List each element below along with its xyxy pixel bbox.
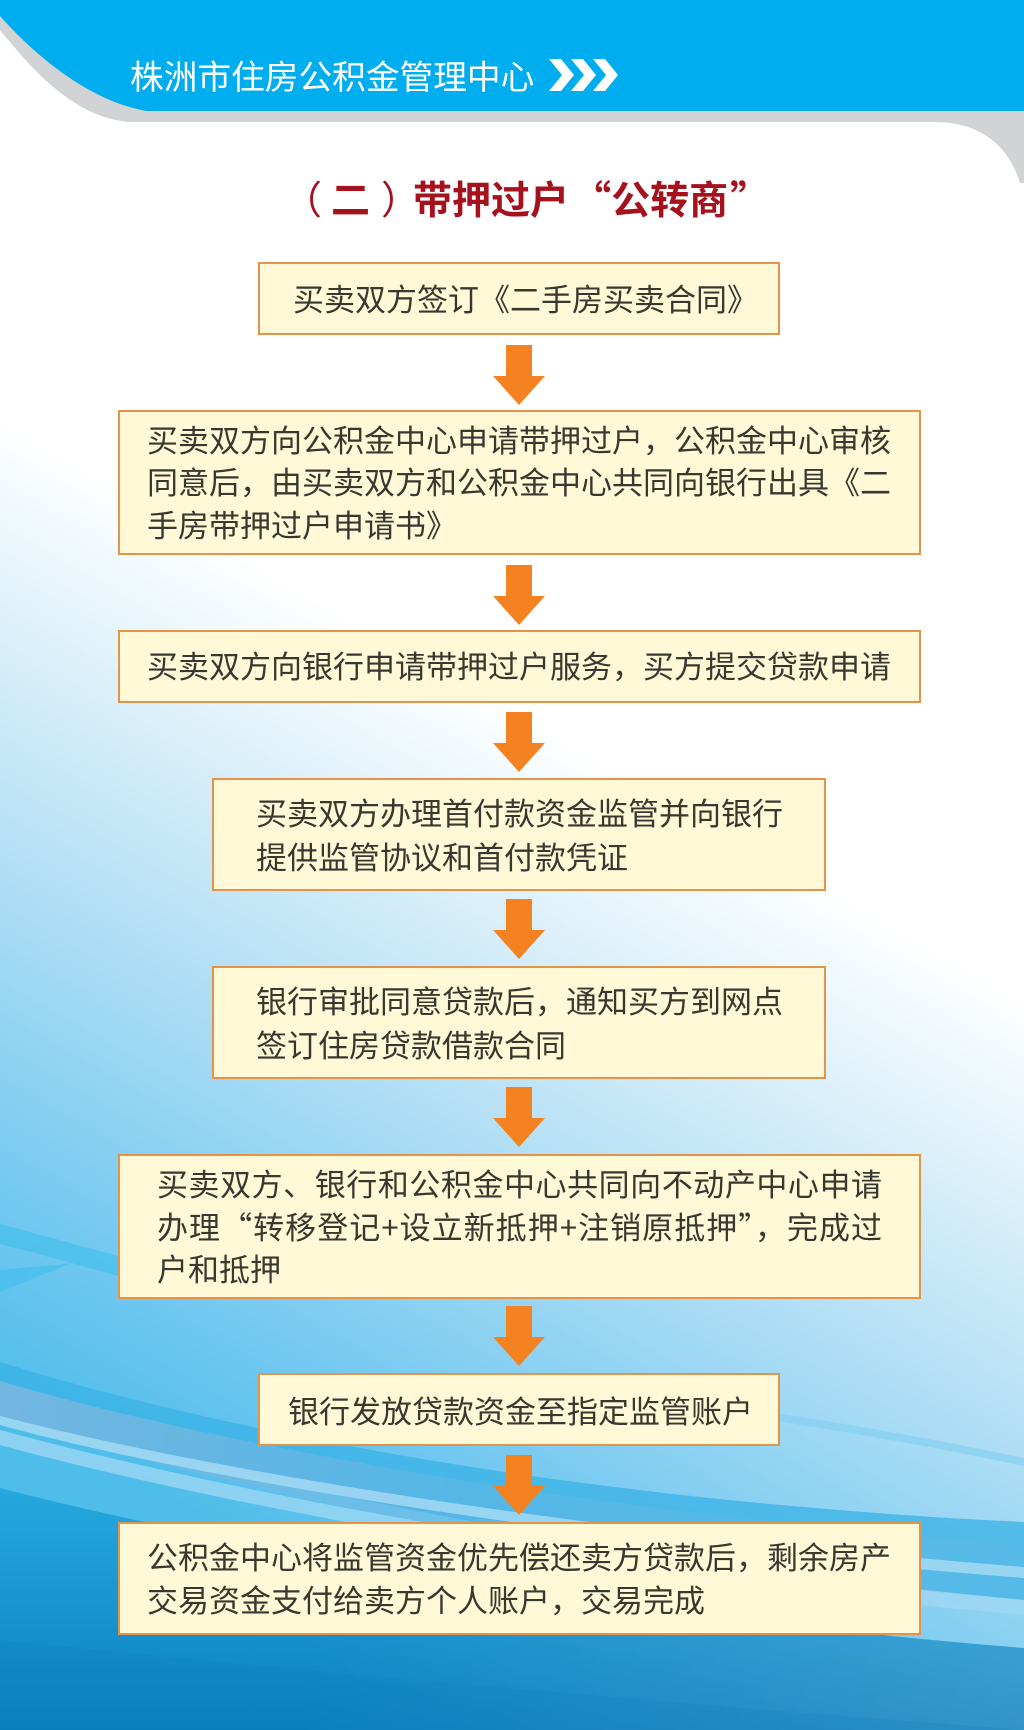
step 2 box: 买卖双方向公积金中心申请带押过户，公积金中心审核 [147,416,891,461]
step 7 box: 银行发放贷款资金至指定监管账户 [288,1387,753,1432]
step 1 box [258,262,780,335]
step 4 box: 提供监管协议和首付款凭证 [256,833,628,878]
step 2 box: 同意后，由买卖双方和公积金中心共同向银行出具《二 [147,458,891,503]
step 1 box: 买卖双方签订《二手房买卖合同》 [293,275,758,320]
step 6 box: 户和抵押 [157,1245,281,1290]
arrow 6 [493,1306,545,1366]
title: （二 ）带押过户“公转商” [283,170,769,226]
step 6 box: 办理“转移登记+设立新抵押+注销原抵押”，完成过 [157,1203,882,1248]
arrow 7 [493,1455,545,1515]
arrow 2 [493,565,545,625]
step 2 box [118,410,921,555]
header organization name: 株洲市住房公积金管理中心 [130,50,534,99]
arrow 5 [493,1087,545,1147]
arrow 1 [493,345,545,405]
step 6 box [118,1154,921,1299]
step 8 box: 交易资金支付给卖方个人账户，交易完成 [147,1576,705,1621]
step 3 box [118,630,921,703]
step 8 box: 公积金中心将监管资金优先偿还卖方贷款后，剩余房产 [147,1533,891,1578]
step 5 box: 银行审批同意贷款后，通知买方到网点 [256,977,783,1022]
step 8 box [118,1522,921,1635]
arrow 3 [493,712,545,772]
step 6 box: 买卖双方、银行和公积金中心共同向不动产中心申请 [157,1160,882,1205]
header banner [0,0,1024,183]
icon: triple chevrons [549,59,618,91]
step 7 box [258,1373,780,1446]
step 5 box [212,966,826,1079]
step 3 box: 买卖双方向银行申请带押过户服务，买方提交贷款申请 [147,642,891,687]
arrow 4 [493,899,545,959]
step 4 box [212,778,826,891]
step 5 box: 签订住房贷款借款合同 [256,1021,566,1066]
step 4 box: 买卖双方办理首付款资金监管并向银行 [256,789,783,834]
step 2 box: 手房带押过户申请书》 [147,501,457,546]
